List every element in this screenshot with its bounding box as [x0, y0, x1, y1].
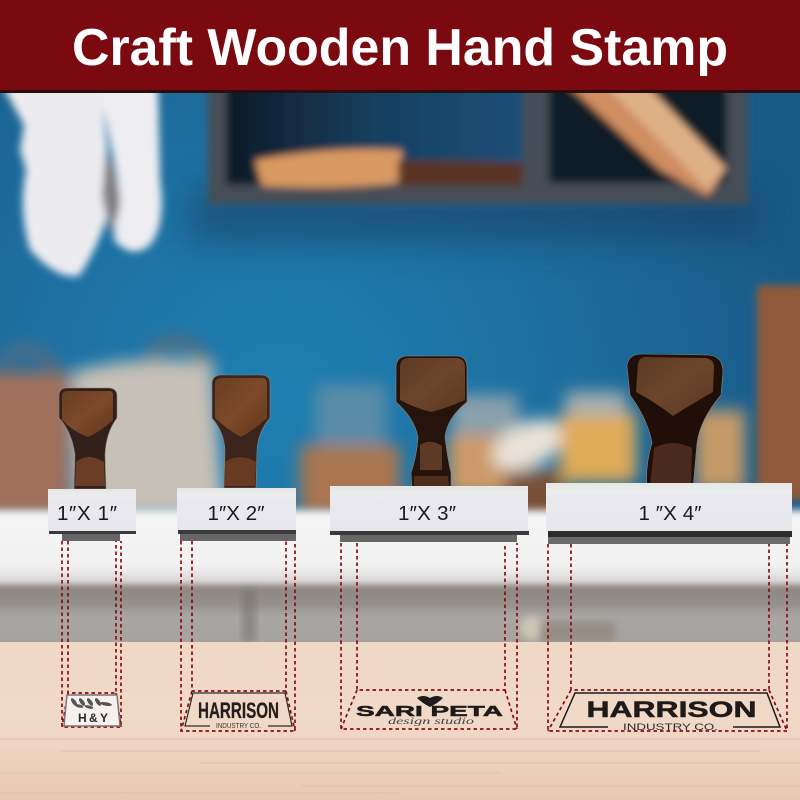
imprint: Harrison large: INDUSTRY CO.	[623, 722, 718, 733]
wooden table	[0, 642, 800, 800]
blurred jars	[300, 385, 745, 520]
imprint: H&Y: H&Y	[78, 711, 108, 725]
block	[177, 488, 296, 531]
heart	[417, 696, 443, 707]
block	[546, 483, 792, 531]
size label: 1″X 2″	[208, 502, 264, 525]
title: Craft Wooden Hand Stamp	[72, 19, 728, 77]
guides: 1x3	[341, 543, 517, 729]
blurred basket	[0, 341, 224, 517]
block	[330, 486, 528, 531]
counter and cabinet	[0, 510, 800, 586]
blurred wooden board	[757, 285, 800, 500]
stamp 1x2	[177, 375, 296, 541]
imprint: Harrison small	[185, 693, 292, 730]
dotted guide lines	[62, 541, 787, 731]
imprint: Sari Peta: design studio	[388, 716, 475, 726]
imprint: Harrison large	[560, 693, 780, 733]
stamp 1x3	[330, 356, 529, 542]
imprint: H&Y	[64, 695, 120, 726]
imprint: Sari Peta	[356, 696, 503, 726]
size label: 1 ″X 4″	[638, 502, 702, 525]
handle	[212, 375, 270, 488]
imprint: Harrison small: HARRISON	[198, 698, 279, 723]
hanging towel	[2, 85, 162, 276]
guides: 1x1	[62, 541, 121, 727]
size label: 1″X 3″	[398, 502, 456, 525]
imprint: Harrison large: HARRISON	[586, 697, 756, 722]
block	[48, 489, 136, 532]
handle	[627, 354, 723, 489]
leaf sprig	[70, 697, 112, 710]
handle	[59, 388, 117, 489]
wall shelf	[208, 80, 748, 204]
guides: 1x2	[181, 541, 295, 731]
stamp 1x4	[546, 354, 792, 544]
stamp 1x1	[48, 388, 136, 541]
guides: 1x4	[548, 544, 787, 731]
size label: 1″X 1″	[57, 502, 117, 525]
handle	[396, 356, 467, 488]
imprint: Harrison small: INDUSTRY CO.	[216, 721, 261, 730]
title banner	[0, 0, 800, 93]
shelf shadow on the wall	[190, 190, 760, 240]
imprint: Sari Peta: SARI PETA	[356, 703, 503, 720]
